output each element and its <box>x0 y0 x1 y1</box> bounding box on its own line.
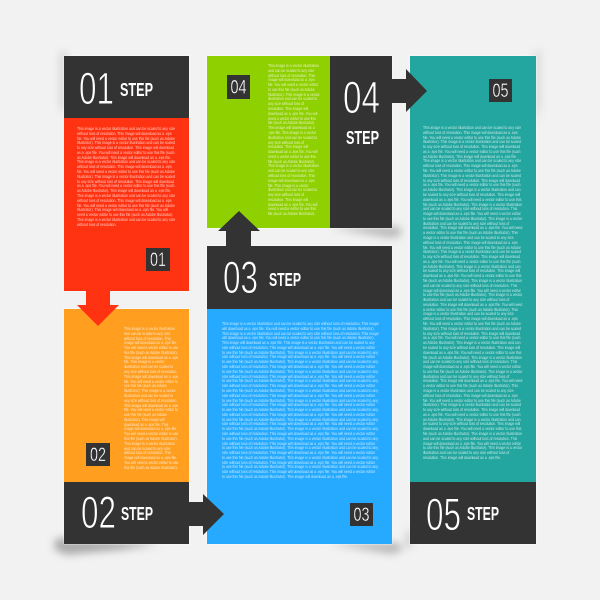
panel: step 05: 05 <box>492 81 508 102</box>
panel: step 01: 01 <box>79 63 114 114</box>
panel: step 04: 04 <box>343 72 380 123</box>
panel: step 03: This image is a vector illustration and can be scaled to any size without loss of resolution. This image will download as a .eps file. You will need a vector editor to use this file (such as Adobe Illustrator). This image is a vector illustration and can be scaled to any size without loss of resolution. This image will download as a .eps file. You will need a vector editor to use this file (such as Adobe Illustrator). This image will download as a .eps file. This image is a vector illustration and can be scaled to any size without loss of resolution. This image will download as a .eps file. You will need a vector editor to use this file (such as Adobe Illustrator). This image is a vector illustration and can be scaled to any size without loss of resolution. This image will download as a .eps file. You will need a vector editor to use this file (such as Adobe Illustrator). This image is a vector illustration and can be scaled to any size without loss of resolution. This image will download as a .eps file. You will need a vector editor to use this file (such as Adobe Illustrator). This image is a vector illustration and can be scaled to any size without loss of resolution. This image will download as a .eps file. You will need a vector editor to use this file (such as Adobe Illustrator). This image is a vector illustration and can be scaled to any size without loss of resolution. This image will download as a .eps file. You will need a vector editor to use this file (such as Adobe Illustrator). This image is a vector illustration and can be scaled to any size without loss of resolution. This image will download as a .eps file. You will need a vector editor to use this file (such as Adobe Illustrator). This image is a vector illustration and can be scaled to any size without loss of resolution. This image will download as a .eps file. You will need a vector editor to use this file (such as Adobe Illustrator). This image is a vector illustration and can be scaled to any size without loss of resolution. This image will download as a .eps file. You will need a vector editor to use this file (such as Adobe Illustrator). This image is a vector illustration and can be scaled to any size without loss of resolution. This image will download as a .eps file. You will need a vector editor to use this file (such as Adobe Illustrator). This image is a vector illustration and can be scaled to any size without loss of resolution. This image will download as a .eps file. You will need a vector editor to use this file (such as Adobe Illustrator). This image is a vector illustration and can be scaled to any size without loss of resolution. This image will download as a .eps file. You will need a vector editor to use this file (such as Adobe Illustrator). This image is a vector illustration and can be scaled to any size without loss of resolution. This image will download as a .eps file. You will need a vector editor to use this file (such as Adobe Illustrator). This image is a vector illustration and can be scaled to any size without loss of resolution. This image will download as a .eps file. You will need a vector editor to use this file (such as Adobe Illustrator). This image is a vector illustration and can be scaled to any size without loss of resolution. This image will download as a .eps file. You will need a vector editor to use this file (such as Adobe Illustrator). This image will download as a .eps file. <box>222 321 379 479</box>
panel: step 03: STEP <box>269 270 301 290</box>
panel: step 04: 04 <box>230 78 247 98</box>
panel: step 01: 01 <box>150 250 166 271</box>
panel: step 02: STEP <box>121 504 153 524</box>
panel: step 04: This image is a vector illustration and can be scaled to any size without loss of resolution. This image will download as a .eps file. You will need a vector editor to use this file (such as Adobe Illustrator). This image is a vector illustration and can be scaled to any size without loss of resolution. This image will download as a .eps file. You will need a vector editor to use this file (such as Adobe Illustrator). This image will download as a .eps file. This image is a vector illustration and can be scaled to any size without loss of resolution. This image will download as a .eps file. You will need a vector editor to use this file (such as Adobe Illustrator). This image is a vector illustration and can be scaled to any size without loss of resolution. This image will download as a .eps file. This image is a vector illustration and can be scaled to any size without loss of resolution. This image will download as a .eps file. You will need a vector editor to use this file (such as Adobe Illustrator). <box>268 63 320 216</box>
panel: step 05: STEP <box>467 504 499 524</box>
panel: step 04 <box>207 56 392 228</box>
panel: step 05 <box>410 56 536 544</box>
panel: step 04: STEP <box>346 128 379 148</box>
panel: step 03: 03 <box>354 505 370 526</box>
panel: step 02: This image is a vector illustration and can be scaled to any size without loss of resolution. This image will download as a .eps file. You will need a vector editor to use this file (such as Adobe Illustrator). This image will download as a .eps file. This image is a vector illustration and can be scaled to any size without loss of resolution. This image will download as a .eps file. You will need a vector editor to use this file (such as Adobe Illustrator). This image is a vector illustration and can be scaled to any size without loss of resolution. This image will download as a .eps file. You will need a vector editor to use this file (such as Adobe Illustrator). This image will download as a .eps file. This image will download as a .eps file. You will need a vector editor to use this file (such as Adobe Illustrator). This image is a vector illustration and can be scaled to any size without loss of resolution. This image will download as a .eps file. You will need a vector editor to use this file (such as Adobe Illustrator). <box>124 326 178 470</box>
panel: step 02: 02 <box>90 445 106 466</box>
panel: step 05: This image is a vector illustration and can be scaled to any size without loss of resolution. This image will download as a .eps file. You will need a vector editor to use this file (such as Adobe Illustrator). This image is a vector illustration and can be scaled to any size without loss of resolution. This image will download as a .eps file. You will need a vector editor to use this file (such as Adobe Illustrator). This image will download as a .eps file. This image is a vector illustration and can be scaled to any size without loss of resolution. This image will download as a .eps file. You will need a vector editor to use this file (such as Adobe Illustrator). This image is a vector illustration and can be scaled to any size without loss of resolution. This image will download as a .eps file. You will need a vector editor to use this file (such as Adobe Illustrator). This image is a vector illustration and can be scaled to any size without loss of resolution. This image will download as a .eps file. You will need a vector editor to use this file (such as Adobe Illustrator). This image is a vector illustration and can be scaled to any size without loss of resolution. This image will download as a .eps file. You will need a vector editor to use this file (such as Adobe Illustrator). This image is a vector illustration and can be scaled to any size without loss of resolution. This image will download as a .eps file. You will need a vector editor to use this file (such as Adobe Illustrator). This image is a vector illustration and can be scaled to any size without loss of resolution. This image will download as a .eps file. You will need a vector editor to use this file (such as Adobe Illustrator). This image is a vector illustration and can be scaled to any size without loss of resolution. This image will download as a .eps file. You will need a vector editor to use this file (such as Adobe Illustrator). This image is a vector illustration and can be scaled to any size without loss of resolution. This image will download as a .eps file. You will need a vector editor to use this file (such as Adobe Illustrator). This image is a vector illustration and can be scaled to any size without loss of resolution. This image will download as a .eps file. You will need a vector editor to use this file (such as Adobe Illustrator). This image is a vector illustration and can be scaled to any size without loss of resolution. This image will download as a .eps file. You will need a vector editor to use this file (such as Adobe Illustrator). This image is a vector illustration and can be scaled to any size without loss of resolution. This image will download as a .eps file. You will need a vector editor to use this file (such as Adobe Illustrator). This image is a vector illustration and can be scaled to any size without loss of resolution. This image will download as a .eps file. You will need a vector editor to use this file (such as Adobe Illustrator). This image is a vector illustration and can be scaled to any size without loss of resolution. This image will download as a .eps file. You will need a vector editor to use this file (such as Adobe Illustrator). This image is a vector illustration and can be scaled to any size without loss of resolution. This image will download as a .eps file. You will need a vector editor to use this file (such as Adobe Illustrator). This image is a vector illustration and can be scaled to any size without loss of resolution. This image will download as a .eps file. You will need a vector editor to use this file (such as Adobe Illustrator). This image is a vector illustration and can be scaled to any size without loss of resolution. This image will download as a .eps file. You will need a vector editor to use this file (such as Adobe Illustrator). This image is a vector illustration and can be scaled to any size without loss of resolution. This image will download as a .eps file. You will need a vector edi <box>423 125 522 460</box>
panel: step 01: This image is a vector illustration and can be scaled to any size without loss of resolution. This image will download as a .eps file. You will need a vector editor to use this file (such as Adobe Illustrator). This image is a vector illustration and can be scaled to any size without loss of resolution. This image will download as a .eps file. You will need a vector editor to use this file (such as Adobe Illustrator). This image will download as a .eps file. This image is a vector illustration and can be scaled to any size without loss of resolution. This image will download as a .eps file. You will need a vector editor to use this file (such as Adobe Illustrator). This image is a vector illustration and can be scaled to any size without loss of resolution. This image will download as a .eps file. You will need a vector editor to use this file (such as Adobe Illustrator). This image will download as a .eps file. This image is a vector illustration and can be scaled to any size without loss of resolution. This image will download as a .eps file. You will need a vector editor to use this file (such as Adobe Illustrator). This image will download as a .eps file. You will need a vector editor to use this file (such as Adobe Illustrator). This image is a vector illustration and can be scaled to any size without loss of resolution. <box>77 126 175 227</box>
arrow: step 02 to 03 <box>188 494 224 535</box>
panel: step 01: STEP <box>120 80 153 100</box>
arrow: step 01 to 02 <box>77 290 119 326</box>
panel: step 02: 02 <box>81 487 116 538</box>
panel: step 03: 03 <box>223 252 258 303</box>
panel: step 05: 05 <box>426 489 461 540</box>
arrow: step 04 to 05 <box>391 69 427 112</box>
panel: step 03 <box>207 246 392 544</box>
panel: step 01 <box>64 56 189 291</box>
panel: step 02 <box>64 309 189 544</box>
arrow: step 03 to 04 <box>218 211 260 247</box>
